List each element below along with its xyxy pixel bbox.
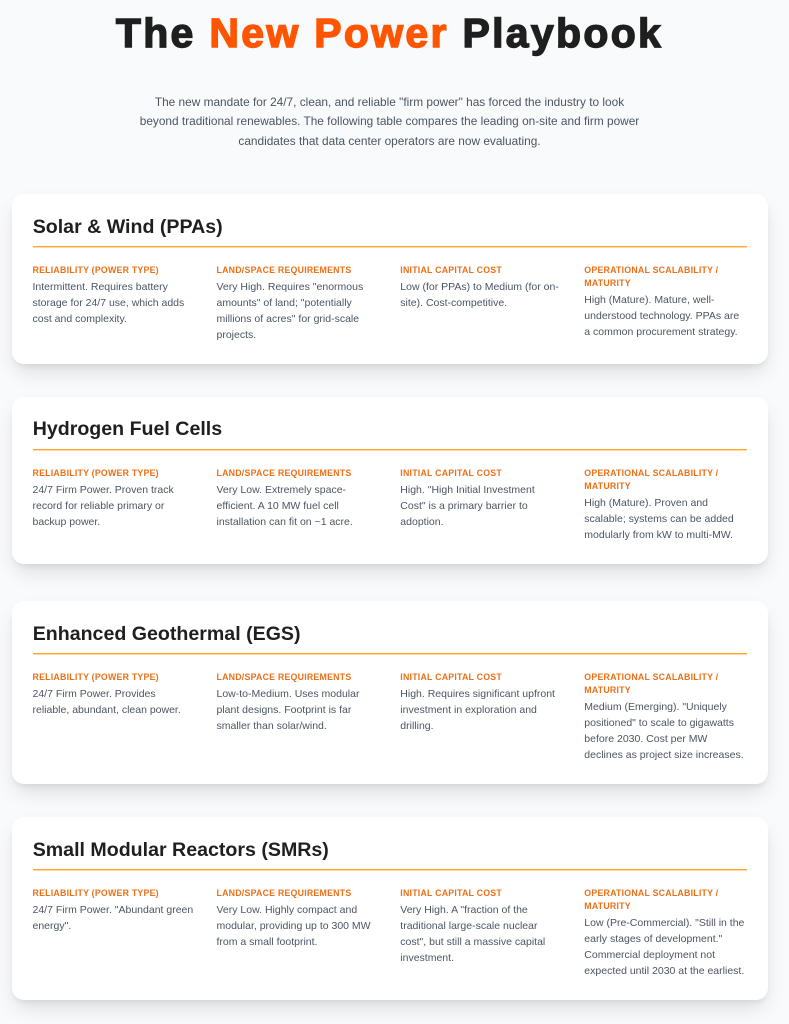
land requirements: plant designs. Footprint is far	[216, 704, 351, 716]
capital cost: investment in exploration and	[400, 704, 537, 716]
scalability: scalable; systems can be added	[584, 513, 734, 525]
panel: Enhanced Geothermal	[12, 601, 768, 784]
land requirements: Very Low. Highly compact and	[216, 904, 357, 916]
reliability: 24/7 Firm Power. Provides	[32, 688, 156, 700]
capital cost: investment.	[400, 952, 454, 964]
capital cost: INITIAL CAPITAL COST	[400, 672, 502, 682]
reliability: Intermittent. Requires battery	[32, 281, 168, 293]
intro text	[140, 95, 639, 148]
scalability: MATURITY	[584, 901, 631, 911]
reliability: RELIABILITY (POWER TYPE)	[32, 672, 159, 682]
scalability: Medium (Emerging). "Uniquely	[584, 701, 727, 713]
capital cost	[400, 468, 535, 528]
capital cost: INITIAL CAPITAL COST	[400, 888, 502, 898]
scalability	[584, 468, 734, 541]
scalability	[584, 672, 744, 761]
scalability: OPERATIONAL SCALABILITY /	[584, 888, 718, 898]
scalability: MATURITY	[584, 278, 631, 288]
scalability: modularly from kW to multi-MW.	[584, 529, 733, 541]
land requirements	[216, 672, 360, 732]
reliability	[32, 265, 184, 325]
scalability: declines as project size increases.	[584, 749, 744, 761]
heading: SMRs	[33, 836, 747, 870]
intro text: candidates that data center operators are now evaluating.	[238, 134, 541, 148]
panel: Small Modular Reactors	[12, 817, 768, 1000]
land requirements: LAND/SPACE REQUIREMENTS	[216, 265, 351, 275]
land requirements	[216, 265, 363, 341]
land requirements: Low-to-Medium. Uses modular	[216, 688, 359, 700]
heading: Hydrogen	[33, 415, 747, 450]
capital cost	[400, 888, 545, 964]
scalability: Low (Pre-Commercial). "Still in the	[584, 917, 744, 929]
intro text: beyond traditional renewables. The following table compares the leading on-site and firm power	[140, 114, 639, 128]
scalability: OPERATIONAL SCALABILITY /	[584, 265, 718, 275]
reliability	[32, 888, 193, 932]
heading: Geothermal	[33, 620, 747, 654]
reliability: RELIABILITY (POWER TYPE)	[32, 888, 159, 898]
capital cost: INITIAL CAPITAL COST	[400, 468, 502, 478]
reliability: energy".	[32, 920, 71, 932]
land requirements: smaller than solar/wind.	[216, 720, 327, 732]
reliability: cost and complexity.	[32, 313, 127, 325]
capital cost: INITIAL CAPITAL COST	[400, 265, 502, 275]
land requirements: millions of acres" for grid-scale	[216, 313, 359, 325]
heading: Geothermal: Enhanced Geothermal (EGS)	[33, 623, 301, 645]
scalability: a common procurement strategy.	[584, 326, 738, 338]
reliability: storage for 24/7 use, which adds	[32, 297, 184, 309]
scalability: MATURITY	[584, 685, 631, 695]
capital cost: High. Requires significant upfront	[400, 688, 555, 700]
heading: SMRs: Small Modular Reactors (SMRs)	[33, 839, 329, 861]
reliability: 24/7 Firm Power. Proven track	[32, 484, 174, 496]
capital cost: adoption.	[400, 516, 444, 528]
land requirements: Very Low. Extremely space-	[216, 484, 346, 496]
land requirements: LAND/SPACE REQUIREMENTS	[216, 888, 351, 898]
scalability	[584, 888, 744, 977]
land requirements	[216, 888, 371, 948]
land requirements: installation can fit on ~1 acre.	[216, 516, 353, 528]
capital cost: drilling.	[400, 720, 434, 732]
reliability: record for reliable primary or	[32, 500, 164, 512]
land requirements: efficient. A 10 MW fuel cell	[216, 500, 339, 512]
capital cost	[400, 672, 555, 732]
intro text: The new mandate for 24/7, clean, and reliable "firm power" has forced the industry to look	[155, 95, 624, 109]
scalability: OPERATIONAL SCALABILITY /	[584, 672, 718, 682]
panel: Hydrogen Fuel Cells	[12, 397, 768, 564]
reliability: RELIABILITY (POWER TYPE)	[32, 468, 159, 478]
land requirements: from a small footprint.	[216, 936, 317, 948]
scalability	[584, 265, 739, 338]
scalability: MATURITY	[584, 481, 631, 491]
capital cost	[400, 265, 559, 309]
capital cost: site). Cost-competitive.	[400, 297, 507, 309]
capital cost: Very High. A "fraction of the	[400, 904, 528, 916]
capital cost: Low (for PPAs) to Medium (for on-	[400, 281, 559, 293]
scalability: early stages of development."	[584, 933, 722, 945]
scalability: positioned" to scale to gigawatts	[584, 717, 734, 729]
reliability: backup power.	[32, 516, 100, 528]
title: The New Power Playbook	[116, 10, 663, 56]
scalability: understood technology. PPAs are	[584, 310, 739, 322]
reliability: RELIABILITY (POWER TYPE)	[32, 265, 159, 275]
scalability: before 2030. Cost per MW	[584, 733, 707, 745]
land requirements: LAND/SPACE REQUIREMENTS	[216, 672, 351, 682]
land requirements: LAND/SPACE REQUIREMENTS	[216, 468, 351, 478]
heading: Hydrogen: Hydrogen Fuel Cells	[33, 418, 222, 440]
panel: Solar & Wind	[12, 194, 768, 364]
capital cost: Cost" is a primary barrier to	[400, 500, 528, 512]
reliability	[32, 468, 174, 528]
land requirements: Very High. Requires "enormous	[216, 281, 363, 293]
scalability: OPERATIONAL SCALABILITY /	[584, 468, 718, 478]
capital cost: traditional large-scale nuclear	[400, 920, 537, 932]
scalability: High (Mature). Proven and	[584, 497, 708, 509]
reliability	[32, 672, 181, 716]
reliability: 24/7 Firm Power. "Abundant green	[32, 904, 193, 916]
scalability: Commercial deployment not	[584, 949, 715, 961]
land requirements: modular, providing up to 300 MW	[216, 920, 371, 932]
scalability: High (Mature). Mature, well-	[584, 294, 714, 306]
land requirements: projects.	[216, 329, 256, 341]
reliability: reliable, abundant, clean power.	[32, 704, 181, 716]
capital cost: High. "High Initial Investment	[400, 484, 535, 496]
heading: Solar & Wind	[33, 213, 747, 247]
land requirements: amounts" of land; "potentially	[216, 297, 352, 309]
land requirements	[216, 468, 353, 528]
heading: Solar & Wind: Solar & Wind (PPAs)	[33, 216, 223, 238]
capital cost: cost", but still a massive capital	[400, 936, 545, 948]
scalability: expected until 2030 at the earliest.	[584, 965, 744, 977]
